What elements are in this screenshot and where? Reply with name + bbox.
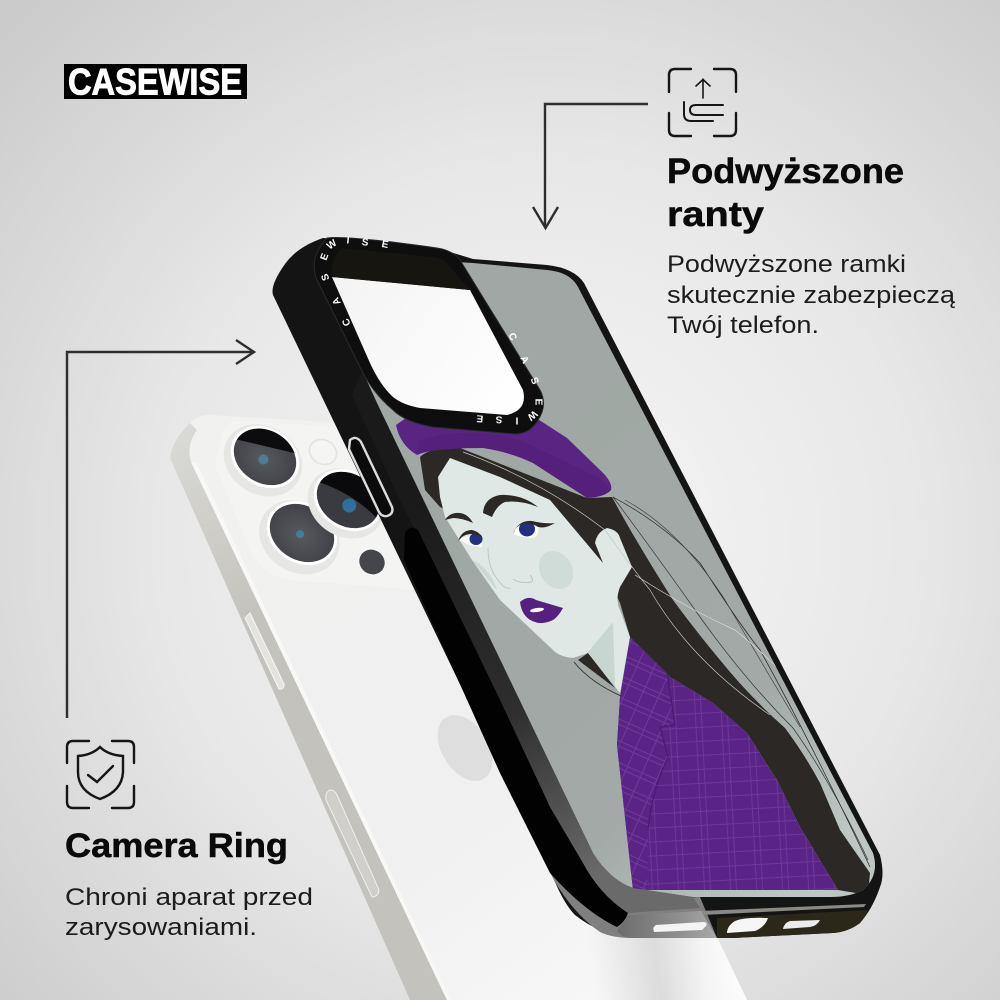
text: camera ring — [65, 884, 313, 941]
eye right — [513, 522, 555, 538]
text: raised edges: Twój telefon. — [667, 312, 819, 339]
phone side band — [170, 423, 447, 1000]
face and neck — [438, 458, 632, 693]
port hole — [727, 918, 768, 933]
heading: camera ring: Camera Ring — [65, 827, 288, 865]
ring lettering: W — [325, 237, 339, 252]
eye left — [459, 537, 482, 547]
phone body — [170, 415, 747, 1000]
artwork — [396, 408, 870, 895]
cheek — [539, 551, 573, 589]
mic hole — [783, 920, 820, 929]
ring lettering: S — [495, 413, 503, 425]
ring hole — [332, 277, 524, 415]
text: raised edges — [667, 251, 956, 339]
bottom grey section — [617, 911, 717, 938]
brow left — [445, 513, 473, 523]
brand logo: CASEWISE — [68, 62, 242, 102]
ring lettering: I — [515, 414, 518, 426]
ring lettering: S — [361, 237, 369, 249]
ring lettering: S — [528, 376, 541, 387]
hat — [396, 418, 612, 498]
lens lower — [245, 485, 354, 589]
heading: raised edges: ranty — [667, 195, 765, 234]
power button — [349, 438, 392, 516]
ring lettering: C — [505, 331, 519, 343]
flash — [305, 435, 341, 469]
lens right — [294, 454, 397, 553]
apple logo — [426, 705, 504, 791]
phone case — [272, 238, 882, 938]
camera plateau — [215, 421, 420, 590]
ring lettering: E — [476, 412, 484, 424]
white phone — [170, 410, 747, 1000]
case body — [272, 238, 882, 938]
bottom edge strip — [717, 910, 868, 938]
lens upper — [210, 410, 316, 511]
black side slot — [404, 528, 628, 927]
sensor — [354, 545, 390, 579]
ring lettering: I — [346, 235, 350, 247]
neck shadow — [588, 622, 615, 687]
ring lettering: E — [319, 252, 331, 262]
ring lettering: W — [524, 408, 539, 423]
side button upper — [245, 613, 284, 689]
collar — [578, 653, 615, 688]
icon: shield — [67, 741, 134, 808]
text: raised edges: Podwyższone ramki — [667, 251, 906, 278]
text: camera ring: zarysowaniami. — [65, 914, 257, 941]
hair — [420, 448, 870, 895]
ring lettering: S — [320, 272, 332, 282]
side button lower — [326, 790, 379, 897]
ring lettering: A — [330, 295, 344, 307]
bottom shading — [500, 880, 747, 1000]
heading: raised edges — [667, 152, 904, 234]
heading: raised edges: Podwyższone — [667, 152, 904, 191]
ring lettering: C — [340, 316, 354, 328]
jacket — [617, 637, 838, 890]
ring outer — [314, 237, 544, 434]
camera ring — [314, 235, 544, 434]
arrow: camera ring — [67, 340, 254, 718]
ring lettering: E — [532, 399, 544, 406]
speaker hole — [653, 922, 707, 932]
lower left translucent edge — [500, 773, 717, 938]
face shadow — [472, 560, 497, 590]
ring inner wall — [332, 248, 470, 290]
icon: raised edges — [669, 69, 736, 136]
back panel — [330, 255, 875, 897]
ring lettering: A — [517, 354, 531, 366]
nose — [488, 548, 532, 588]
hair strands — [463, 452, 870, 867]
brow right — [483, 495, 538, 517]
text: camera ring: Chroni aparat przed — [65, 884, 313, 911]
ring lettering: E — [381, 239, 390, 251]
lips — [520, 598, 563, 623]
text: raised edges: skutecznie zabezpieczą — [667, 282, 956, 309]
band beside back panel — [352, 372, 700, 913]
arrow: raised edges — [533, 104, 648, 228]
ring lettering — [319, 235, 544, 426]
